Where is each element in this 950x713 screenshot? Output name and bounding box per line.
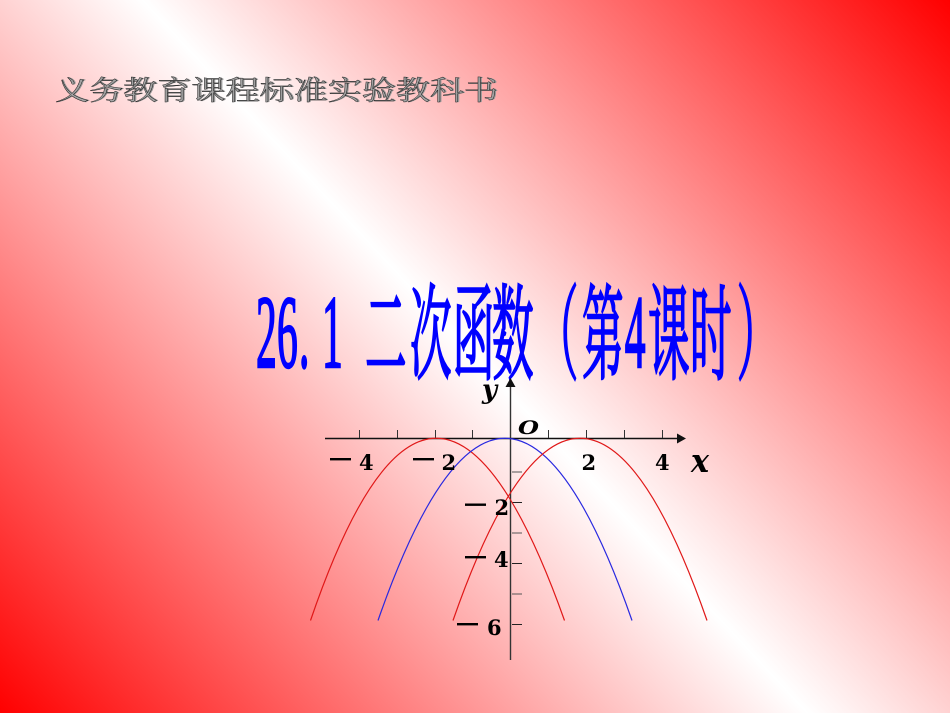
y axis xyxy=(506,378,516,660)
chart: parabolas on coordinate axes xyxy=(310,375,709,660)
parabola: centre blue curve, vertex at origin xyxy=(378,438,632,620)
parabola: left red curve, vertex at x = -2 xyxy=(310,438,564,620)
label: -6 on y axis: 6 xyxy=(487,615,502,640)
label: x: x xyxy=(690,441,709,480)
axis labels xyxy=(330,375,709,640)
label: 2 on x axis: 2 xyxy=(582,450,596,475)
label: -2 on x axis xyxy=(413,450,456,475)
label: O: O xyxy=(518,417,540,439)
x axis xyxy=(325,434,686,444)
label: -4 on x axis: 4 xyxy=(359,450,374,475)
y axis tick marks xyxy=(512,472,522,624)
label: -2 on y axis: 2 xyxy=(494,495,509,520)
heading: textbook series name: 义务教育课程标准实验教科书 xyxy=(55,76,498,106)
parabola: right red curve, vertex at x = 2 xyxy=(453,438,707,620)
label: -2 on y axis xyxy=(465,495,509,520)
label: -4 on y axis: 4 xyxy=(494,547,509,572)
label: -4 on x axis xyxy=(330,450,374,475)
x axis tick marks xyxy=(360,430,662,438)
label: y: y xyxy=(481,375,499,405)
label: 4 on x axis: 4 xyxy=(655,450,670,475)
label: -2 on x axis: 2 xyxy=(442,450,456,475)
label: -6 on y axis xyxy=(457,615,502,640)
label: -4 on y axis xyxy=(465,547,509,572)
title: lesson title: 26.1 二次函数（第4课时） xyxy=(256,275,778,395)
